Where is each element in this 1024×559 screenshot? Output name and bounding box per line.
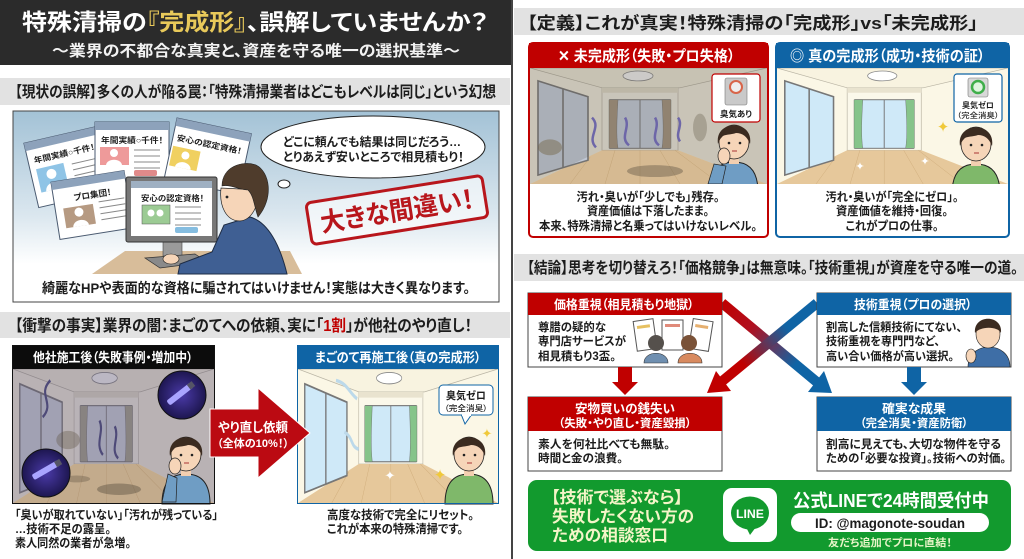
thought bubble: とりあえず安いところで相見積もり！ xyxy=(283,149,464,164)
arrow: price to cheap loss xyxy=(612,367,638,395)
section heading: shocking fact xyxy=(0,312,510,338)
icon: professional pointing xyxy=(966,319,1010,367)
section heading: definition xyxy=(514,8,1024,35)
arrow: redo request xyxy=(210,388,310,478)
stamp: big mistake: 大きな間違い！ xyxy=(318,184,476,238)
consultation text xyxy=(551,488,694,545)
box: cheap purchase loss xyxy=(528,397,722,471)
arrow: technique to sure result xyxy=(901,367,927,395)
consultation text: ための相談窓口 xyxy=(552,526,668,545)
browser window: certification right: 安心の認定資格！ xyxy=(176,132,243,156)
description: 資産価値を維持・回復。 xyxy=(836,203,948,218)
man in green shirt xyxy=(445,437,493,504)
box: technique focus: 高い合い価格が高い選択。 xyxy=(826,349,954,363)
odor meter badge xyxy=(954,74,1002,122)
browser window: annual record left xyxy=(24,125,119,208)
speech bubble: zero odor xyxy=(439,385,493,424)
caption: success: これが本来の特殊清掃です。 xyxy=(327,521,463,536)
LINE id pill xyxy=(791,513,989,532)
sparkles: ✦ xyxy=(855,161,865,173)
description: 資産価値は下落したまま。 xyxy=(587,203,709,218)
panel: redo result xyxy=(297,345,499,504)
computer monitor: 安心の認定資格！ xyxy=(141,193,204,203)
box: cheap purchase loss: （失敗・やり直し・資産毀損） xyxy=(558,416,692,430)
black-light inset bottom xyxy=(22,449,70,497)
panel: incomplete: ✕ 未完成形（失敗・プロ失格） xyxy=(558,47,735,65)
man covering nose xyxy=(162,437,210,504)
section heading: shocking fact: 【衝撃の事実】業界の闇：まごのてへの依頼、実に「1割」が他社のやり直し！ xyxy=(15,316,472,335)
box: technique focus: 技術重視（プロの選択） xyxy=(854,297,972,312)
box: cheap purchase loss: 素人を何社比べても無駄。 xyxy=(538,437,670,451)
black-light inset top xyxy=(158,371,206,419)
caption: success xyxy=(327,507,474,536)
section heading: current misconception xyxy=(0,78,510,105)
caption: failure xyxy=(15,507,218,550)
box: sure result: ための「必要な投資」。技術への対価。 xyxy=(826,451,1006,465)
sparkles: ✦ xyxy=(482,426,493,441)
description xyxy=(539,189,757,233)
clean room illustration xyxy=(298,369,498,503)
arrow: price to sure result (crossing) xyxy=(722,303,832,393)
icon: LINE xyxy=(723,488,777,542)
computer monitor xyxy=(126,177,217,268)
browser window: annual record centre xyxy=(95,122,169,182)
odor meter badge: （完全消臭） xyxy=(957,110,999,120)
sparkles: ✦ xyxy=(434,467,446,484)
person at computer xyxy=(163,163,287,274)
panel: other company's result xyxy=(12,345,215,504)
box: sure result xyxy=(817,397,1011,471)
dirty room illustration xyxy=(530,68,767,184)
speech bubble: zero odor: （完全消臭） xyxy=(444,403,488,413)
sparkles xyxy=(385,426,493,484)
title banner xyxy=(0,0,512,65)
consultation text: 【技術で選ぶなら】 xyxy=(551,488,683,507)
LINE note: 友だち追加でプロに直結！ xyxy=(828,536,952,549)
box: technique focus xyxy=(817,293,1011,367)
dirty room illustration xyxy=(13,369,214,503)
browser window: pro team: プロ集団！ xyxy=(73,187,112,203)
panel: true complete xyxy=(776,43,1009,237)
box: sure result: （完全消臭・資産防衛） xyxy=(860,416,968,430)
browser window: pro team xyxy=(51,171,133,239)
LINE id pill: ID: @magonote-soudan xyxy=(815,516,965,531)
section heading: conclusion xyxy=(514,254,1024,281)
box: price focus: 価格重視（相見積もり地獄） xyxy=(554,297,694,312)
panel: redo result: まごのて再施工後（真の完成形） xyxy=(315,350,481,365)
browser window: annual record centre: 年間実績○千件！ xyxy=(101,135,163,145)
speech bubble: zero odor: 臭気ゼロ xyxy=(446,389,486,402)
sparkles: ✦ xyxy=(920,156,930,168)
icon: people comparing quotes xyxy=(633,319,713,363)
description: 汚れ・臭いが「完全にゼロ」。 xyxy=(826,189,958,204)
sparkles: ✦ xyxy=(937,119,949,136)
man covering nose xyxy=(708,125,758,192)
description: 汚れ・臭いが「少しでも」残存。 xyxy=(576,189,720,204)
LINE heading: 公式LINEで24時間受付中 xyxy=(793,490,989,511)
call to action banner xyxy=(528,480,1011,551)
arrow: redo request: （全体の10%！） xyxy=(217,436,289,450)
caption: success: 高度な技術で完全にリセット。 xyxy=(327,507,474,522)
clean room illustration xyxy=(777,68,1008,184)
caption: failure: 素人同然の業者が急増。 xyxy=(15,535,131,550)
odor meter badge xyxy=(712,74,760,122)
odor meter badge: 臭気あり xyxy=(720,109,752,119)
odor meter badge: 臭気ゼロ xyxy=(962,100,994,110)
consultation text: 失敗したくない方の xyxy=(552,506,694,526)
caption: failure: …技術不足の露呈。 xyxy=(15,521,111,536)
box: technique focus: 割高した信頼技術にてない、 xyxy=(826,320,962,334)
description: これがプロの仕事。 xyxy=(846,218,938,233)
sparkles: ✦ xyxy=(385,468,396,483)
box: cheap purchase loss: 安物買いの銭失い xyxy=(575,401,675,416)
man in green shirt xyxy=(952,127,1000,194)
panel: incomplete xyxy=(529,43,768,237)
subtitle: ～業界の不都合な真実と、資産を守る唯一の選択基準～ xyxy=(52,41,460,60)
section heading: current misconception: 【現状の誤解】多くの人が陥る罠：「特殊清掃業者はどこもレベルは同じ」という幻想 xyxy=(15,82,496,101)
arrow: technique to cheap loss (crossing) xyxy=(707,303,817,393)
desk xyxy=(92,251,302,274)
box: price focus: 専門店サービスが xyxy=(538,334,627,348)
caption: failure: 「臭いが取れていない」「汚れが残っている」 xyxy=(15,507,218,522)
panel: misconception illustration xyxy=(13,111,499,302)
box: cheap purchase loss: 時間と金の浪費。 xyxy=(538,451,623,465)
main title: 特殊清掃の 『完成形』 、誤解していませんか？ xyxy=(22,9,488,35)
sparkles xyxy=(855,119,949,173)
box: technique focus: 技術重視を専門門など、 xyxy=(826,334,940,348)
thought bubble: どこに頼んでも結果は同じだろう… xyxy=(283,134,461,149)
caption: 綺麗なHPや表面的な資格に騙されてはいけません！実態は大きく異なります。 xyxy=(42,280,470,296)
browser window: certification right xyxy=(164,118,251,194)
box: sure result: 確実な成果 xyxy=(882,401,947,416)
arrow: redo request: やり直し依頼 xyxy=(218,420,288,435)
box: sure result: 割高に見えても、大切な物件を守る xyxy=(826,437,1001,451)
description xyxy=(826,189,958,233)
box: price focus xyxy=(528,293,722,367)
panel: true complete: ◎ 真の完成形（成功・技術の証） xyxy=(790,47,985,65)
icon: LINE: LINE xyxy=(736,509,764,521)
panel: other company's result: 他社施工後（失敗事例・増加中） xyxy=(33,350,193,365)
box: price focus: 相見積もり3盃。 xyxy=(538,349,616,363)
browser window: annual record left: 年間実績○千件！ xyxy=(33,142,96,165)
thought bubble xyxy=(261,116,485,188)
box: price focus: 尊腊の疑的な xyxy=(538,320,606,334)
description: 本来、特殊清掃と名乗ってはいけないレベル。 xyxy=(539,218,757,233)
section heading: definition: 【定義】これが真実！特殊清掃の「完成形」vs「未完成形」 xyxy=(527,13,978,33)
